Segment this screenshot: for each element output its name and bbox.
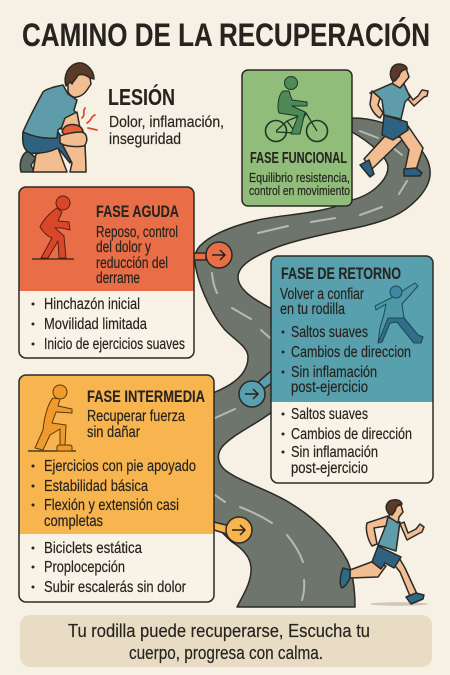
aguda list: Movilidad limitada <box>44 316 147 333</box>
back leg <box>33 148 67 172</box>
intermedia list upper: Flexión y extensión casi <box>44 497 179 514</box>
intermedia list lower: Biciclets estática <box>44 540 142 557</box>
closing message banner <box>20 615 432 667</box>
arrow marker: retorno <box>239 370 272 407</box>
retorno list upper: Sin inflamación <box>291 364 377 381</box>
arm <box>61 112 80 131</box>
retorno list lower: Saltos suaves <box>291 406 368 423</box>
intermedia text: Recuperar fuerza <box>87 408 185 425</box>
closing message banner: Tu rodilla puede recuperarse, Escucha tu <box>68 621 370 641</box>
aguda text: Reposo, control <box>96 224 178 241</box>
lesion heading and text: inseguridad <box>109 131 181 148</box>
closing message banner: cuerpo, progresa con calma. <box>129 643 323 663</box>
lesion heading and text: LESIÓN <box>108 83 175 110</box>
runner, top <box>360 64 428 177</box>
intermedia text <box>87 387 205 441</box>
shorts <box>23 132 72 163</box>
panel: fase intermedia <box>19 375 214 602</box>
retorno text: Volver a confiar <box>280 286 364 303</box>
funcional text: FASE FUNCIONAL <box>250 150 347 167</box>
funcional text <box>249 150 350 198</box>
retorno text: FASE DE RETORNO <box>281 264 401 283</box>
aguda list <box>32 296 185 353</box>
lesion heading and text: Dolor, inflamación, <box>109 114 224 131</box>
red knee <box>62 125 83 140</box>
funcional text: Equilibrio resistencia, <box>249 170 350 185</box>
aguda list: Hinchazón inicial <box>44 296 140 313</box>
intermedia list upper <box>32 458 196 530</box>
front leg <box>60 132 86 172</box>
arrow marker: intermedia <box>214 517 252 543</box>
intermedia text: sin dañar <box>87 424 140 441</box>
intermedia list upper: Ejercicios con pie apoyado <box>44 458 196 475</box>
retorno list lower: Sin inflamación <box>291 444 378 461</box>
hair <box>65 63 94 86</box>
retorno list lower <box>282 406 412 477</box>
lesion heading and text <box>108 83 224 148</box>
aguda text: reducción del <box>96 255 168 272</box>
winding road <box>195 118 430 607</box>
intermedia text: FASE INTERMEDIA <box>87 387 205 406</box>
foot <box>20 151 36 172</box>
intermedia list lower: Proplocepción <box>44 559 125 576</box>
intermedia list lower: Subir escalerás sin dolor <box>44 579 186 596</box>
shirt <box>23 85 77 138</box>
retorno list upper <box>282 324 411 396</box>
retorno text: en tu rodilla <box>280 301 345 318</box>
retorno list lower: Cambios de dirección <box>291 426 412 443</box>
retorno list upper: post-ejercicio <box>291 379 368 396</box>
retorno text <box>280 264 401 318</box>
icon: figure on step <box>28 385 76 451</box>
panel: fase funcional <box>242 70 352 206</box>
aguda text <box>96 202 179 287</box>
funcional text: control en movimiento <box>249 183 350 198</box>
aguda text: derrame <box>96 270 140 287</box>
retorno list lower: post-ejercicio <box>291 460 368 477</box>
head <box>68 72 91 97</box>
icon: bent figure <box>32 196 74 259</box>
intermedia list upper: completas <box>44 513 103 530</box>
intermedia list lower <box>32 540 186 596</box>
icon: jumping figure <box>375 283 423 343</box>
aguda text: FASE AGUDA <box>96 202 179 221</box>
panel: fase aguda <box>19 187 194 358</box>
arrow marker: aguda <box>194 242 232 268</box>
panel: fase de retorno <box>271 256 433 483</box>
runner, bottom <box>340 500 428 606</box>
pain marks <box>82 108 97 130</box>
injured man illustration <box>20 63 97 172</box>
retorno list upper: Saltos suaves <box>291 324 368 341</box>
intermedia list upper: Estabilidad básica <box>44 478 148 495</box>
hand <box>60 132 87 147</box>
icon: cyclist <box>266 76 328 142</box>
retorno list upper: Cambios de direccion <box>291 344 411 361</box>
aguda text: del dolor y <box>96 239 151 256</box>
aguda list: Inicio de ejercicios suaves <box>44 336 185 353</box>
